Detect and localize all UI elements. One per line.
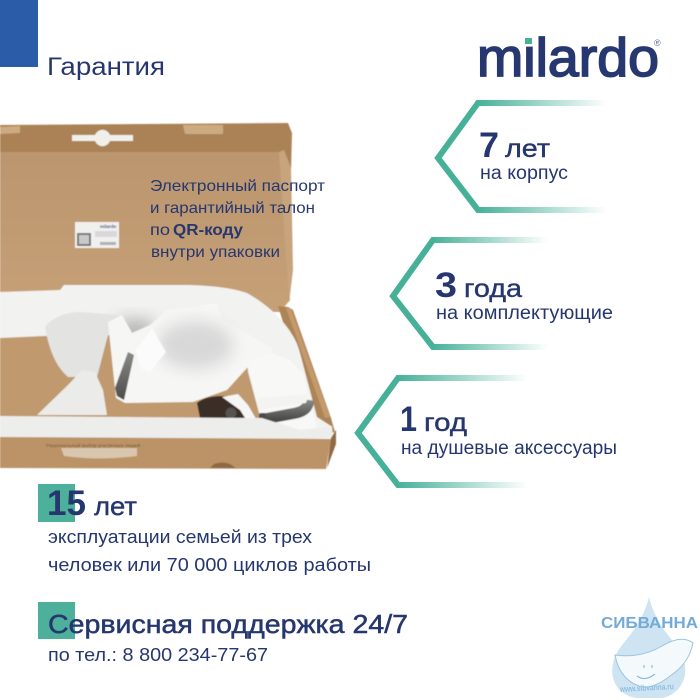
chevron: 7 лет: 7 [479,126,499,165]
bathtub face [637,665,655,679]
chevron: 7 лет: на корпус [480,163,568,184]
block: service support: по тел.: 8 800 234-77-67 [48,644,268,665]
photo: opened box with packaged faucet [0,123,336,469]
sleeve cuff [258,394,309,410]
box floor [0,330,318,425]
QR label: milardo [100,224,117,229]
block: 15 лет: лет [94,491,137,521]
box right wall rim [286,308,330,418]
logo: milardo: milardo [477,28,659,88]
spout tip [259,413,266,426]
logo: milardo: ® [654,38,661,48]
water drop [612,597,685,698]
bag fold [136,328,166,372]
front tab [210,462,236,468]
bag shading [157,321,233,369]
handle cutout [61,448,137,458]
lid right flap [279,150,293,303]
small pipe piece [226,408,236,418]
watermark: Сибванна [601,597,698,698]
box right wall [278,306,335,436]
QR text on lid: внутри упаковки [151,244,280,261]
dark opening [197,396,246,418]
lid back panel [0,123,292,170]
chevron: 3 года: на комплектующие [436,303,613,324]
heading: Гарантия: Гарантия [47,53,165,81]
chevron: 7 лет: лет [505,135,551,163]
lid hanger slot [72,130,133,146]
faucet body [115,352,134,400]
box front wall [0,437,331,469]
block: 15 лет: 15 [47,484,86,523]
brand name: СИБВАННА [601,615,698,632]
chevron: 3 года: 3 [435,266,457,305]
bubble wrap ball [45,312,120,377]
spout [264,400,309,419]
upper foam wrap [0,285,331,438]
QR text on lid [150,178,326,261]
bathtub [615,639,693,687]
foam flap [222,394,262,429]
block: 15 лет [38,484,371,575]
block: 15 лет: эксплуатации семьей из трех [48,526,313,547]
block: service support: Сервисная поддержка 24/7 [48,609,408,639]
lid tabs [0,125,223,134]
chevron: 1 год: год [424,409,467,437]
QR label [75,222,119,248]
chevron: 3 года: года [464,275,522,303]
chevron: 1 год: 1 [400,400,417,439]
chevron: 7 лет [438,103,607,210]
white bag [108,303,273,403]
chevron: 1 год: на душевые аксессуары [401,438,617,459]
chevron: 3 года [393,240,613,347]
box front corner [327,430,336,468]
front wall printed text: Рациональный выбор practичных людей [46,442,140,449]
blue corner block [0,0,38,67]
bottom foam band [0,416,333,440]
QR text on lid: Электронный паспорт [150,178,326,195]
QR text on lid: и гарантийный талон [150,200,315,217]
website: www.sibvanna.ru [619,681,674,694]
QR text on lid: по [150,222,170,239]
lid interior [0,152,290,312]
block: service support [38,602,408,665]
QR text on lid: QR-коду [173,222,243,239]
right foam sleeve [247,353,318,432]
chevron: 1 год [358,378,617,485]
bubble wrap tail [37,370,107,415]
foam shading [118,318,155,345]
block: 15 лет: человек или 70 000 циклов работы [48,554,371,575]
